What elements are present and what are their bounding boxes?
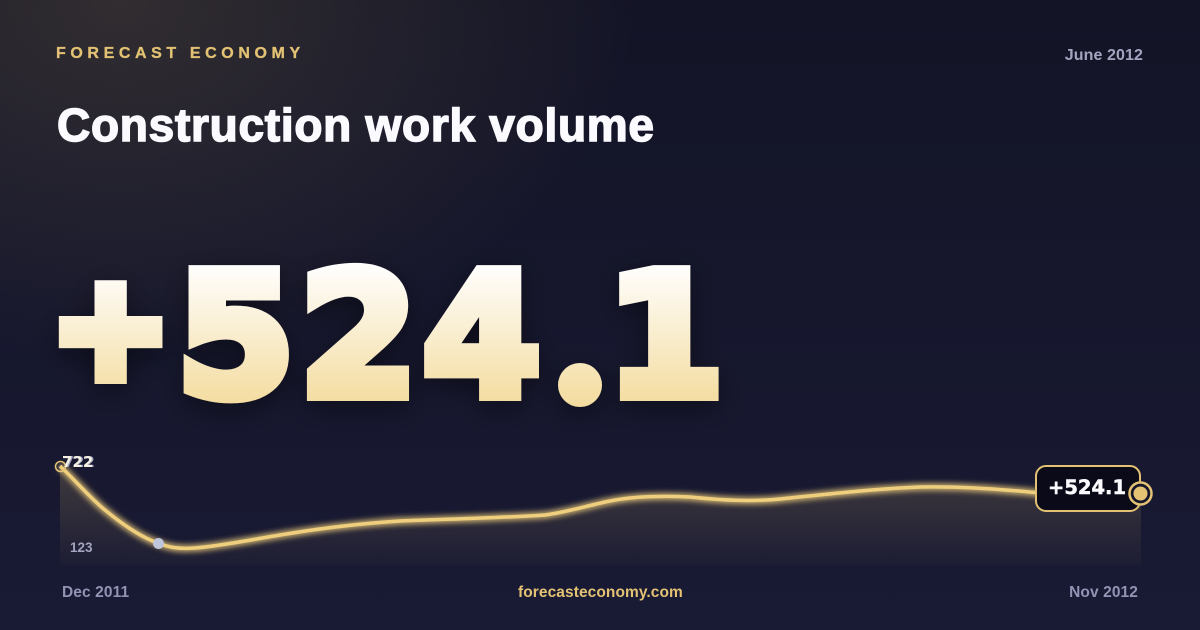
website: forecasteconomy.com bbox=[518, 584, 683, 601]
area fill bbox=[60, 466, 1141, 565]
brand label: FORECAST ECONOMY bbox=[56, 45, 305, 62]
hero value: 4 bbox=[422, 238, 541, 436]
hero value: 2 bbox=[300, 238, 418, 436]
hero value: 1 bbox=[606, 238, 724, 436]
min marker bbox=[153, 538, 164, 549]
end marker bbox=[1130, 482, 1152, 504]
max marker bbox=[56, 462, 66, 472]
end date: Nov 2012 bbox=[1069, 584, 1138, 601]
line bbox=[60, 466, 1040, 548]
hero value: + bbox=[52, 247, 169, 410]
hero value: . bbox=[570, 339, 593, 409]
start date: Dec 2011 bbox=[62, 584, 129, 601]
line glow bbox=[60, 466, 1040, 548]
date: June 2012 bbox=[1065, 47, 1143, 64]
end value badge: +524.1 bbox=[1048, 476, 1126, 499]
max label: 722 bbox=[64, 453, 95, 471]
min label: 123 bbox=[70, 540, 93, 555]
end value badge bbox=[1036, 466, 1140, 511]
max label: 722 bbox=[62, 453, 93, 471]
hero value: 5 bbox=[176, 238, 295, 436]
title: Construction work volume bbox=[57, 99, 654, 151]
